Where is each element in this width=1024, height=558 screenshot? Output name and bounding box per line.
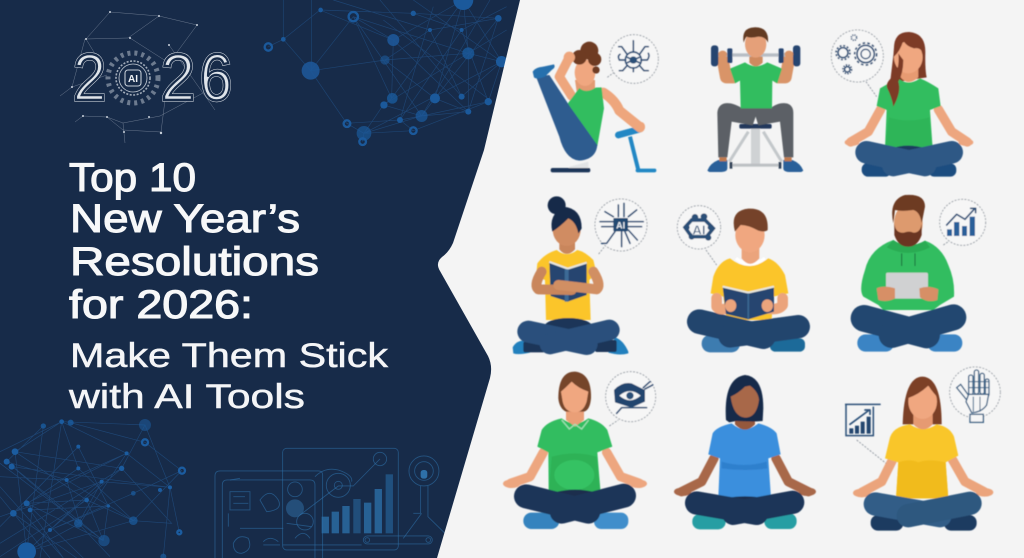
bubble (607, 35, 658, 83)
figure 9: meditating woman, yellow shirt (845, 367, 1000, 531)
network graphic: bottom left (0, 419, 185, 558)
logo: 2026 with AI (60, 11, 232, 143)
digits 2 2 6: 2 (73, 40, 106, 114)
figure 2: man lifting dumbbells (707, 27, 803, 172)
bubble AI network (677, 206, 721, 265)
digits 2 2 6: 2 (73, 40, 106, 114)
digits 2 2 6: 2 (161, 40, 195, 114)
figures group (503, 27, 1000, 531)
figure 6: bearded man with tablet (857, 195, 986, 352)
bubble AI network: AI (692, 223, 706, 238)
logo: 2026 with AI: AI (128, 74, 138, 85)
digits 2 2 6: 6 (200, 40, 232, 114)
bubble AI chip (595, 199, 647, 254)
chart frame icon (845, 404, 886, 463)
AI circuit ring (108, 53, 158, 103)
subtitle: Make Them Stick (70, 337, 389, 375)
barbell (711, 45, 800, 66)
bench and stand (551, 129, 656, 172)
dashboard outline graphic (215, 448, 445, 558)
figure 7: meditating woman, green shirt (503, 372, 656, 529)
title: Top 10 (69, 156, 196, 200)
subtitle: with AI Tools (68, 378, 305, 416)
bubble AI chip: AI (616, 220, 625, 230)
figure 5: man reading book (677, 206, 805, 352)
digits 2 2 6: 6 (200, 40, 232, 114)
bubble robotic hand (950, 367, 1000, 422)
title: for 2026: (69, 283, 253, 327)
title (69, 156, 319, 327)
panel: light illustration area (437, 0, 1024, 558)
title: New Year’s (70, 197, 300, 241)
figure 1: stretching woman (533, 35, 658, 172)
subtitle (68, 337, 389, 416)
title: Resolutions (70, 240, 319, 284)
figure 8: meditating woman, blue shirt (674, 375, 816, 529)
chair (729, 124, 782, 169)
digits 2 2 6 (73, 40, 232, 114)
digits 2 2 6: 2 (161, 40, 195, 114)
figure 4: woman with book, arms crossed (513, 196, 647, 355)
figure 3: meditating woman with gears (831, 30, 973, 177)
bubble gears (831, 30, 883, 97)
bubble eye (606, 372, 656, 426)
bubble chart (940, 199, 986, 245)
hair bun (572, 42, 601, 74)
network graphic: top (265, 0, 507, 145)
